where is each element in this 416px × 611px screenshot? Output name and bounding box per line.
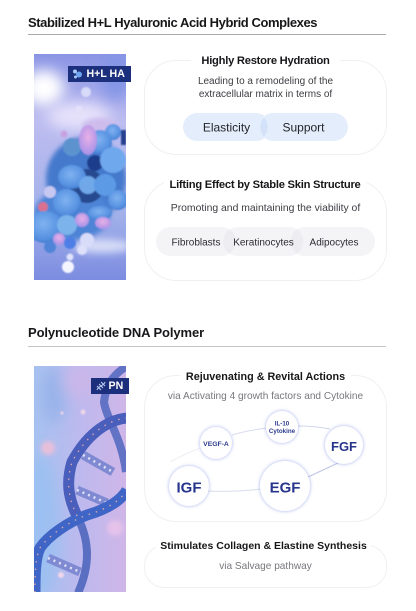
node: VEGF-A: VEGF-A xyxy=(203,441,229,448)
node: VEGF-A xyxy=(200,427,232,459)
text block: via Salvage pathway xyxy=(219,561,312,572)
node: EGF xyxy=(260,461,310,511)
panel: rejuvenating and revital actions xyxy=(144,375,387,522)
node: FGF: FGF xyxy=(331,439,357,454)
icon: molecule xyxy=(73,70,82,78)
node: EGF: EGF xyxy=(270,480,300,496)
label: PN tag xyxy=(91,378,129,394)
panel: lifting effect xyxy=(144,180,387,281)
heading xyxy=(180,369,351,385)
label: PN tag: PN xyxy=(108,380,123,392)
heading: Highly Restore Hydration xyxy=(201,55,330,67)
image: DNA helix xyxy=(34,366,126,592)
panel: highly restore hydration xyxy=(144,60,387,155)
helix strands xyxy=(35,366,127,593)
icon: helix xyxy=(96,382,106,390)
label: H+L HA tag: H+L HA xyxy=(86,68,125,80)
text block: Leading to a remodeling of the xyxy=(198,76,333,87)
pills: cell types: Keratinocytes xyxy=(233,238,294,248)
node: IGF xyxy=(169,466,209,506)
text block: Promoting and maintaining the viability of xyxy=(171,203,360,214)
heading: Stimulates Collagen & Elastine Synthesis xyxy=(160,540,367,552)
pills: cell types: Adipocytes xyxy=(310,238,358,248)
node: FGF xyxy=(325,426,363,464)
pills: elasticity and support: Elasticity xyxy=(203,120,250,134)
text block xyxy=(198,76,333,100)
heading: Lifting Effect by Stable Skin Structure xyxy=(169,179,361,191)
molecule blobs xyxy=(27,118,128,273)
heading: Rejuvenating & Revital Actions xyxy=(186,371,345,383)
text block: extracellular matrix in terms of xyxy=(199,89,332,100)
panel: stimulates collagen xyxy=(144,545,387,588)
image: molecular cluster xyxy=(34,54,126,280)
node: IL-10 Cytokine xyxy=(266,411,298,443)
node: IL-10 Cytokine: IL-10 xyxy=(275,420,290,428)
node: IL-10 Cytokine: Cytokine xyxy=(269,428,296,435)
pills: elasticity and support: Support xyxy=(282,120,325,134)
text block: via Activating 4 growth factors and Cytokine xyxy=(168,391,363,402)
pills: elasticity and support xyxy=(183,113,348,141)
heading: polynucleotide section: Polynucleotide DNA Polymer xyxy=(28,324,204,340)
pills: cell types xyxy=(156,227,375,256)
diagram: growth factor network xyxy=(166,408,366,514)
label: H+L HA tag xyxy=(68,66,131,82)
pills: cell types: Fibroblasts xyxy=(172,238,220,248)
heading: hyaluronic acid section: Stabilized H+L Hyaluronic Acid Hybrid Complexes xyxy=(28,15,317,30)
node: IGF: IGF xyxy=(176,480,202,496)
heading xyxy=(191,53,340,69)
